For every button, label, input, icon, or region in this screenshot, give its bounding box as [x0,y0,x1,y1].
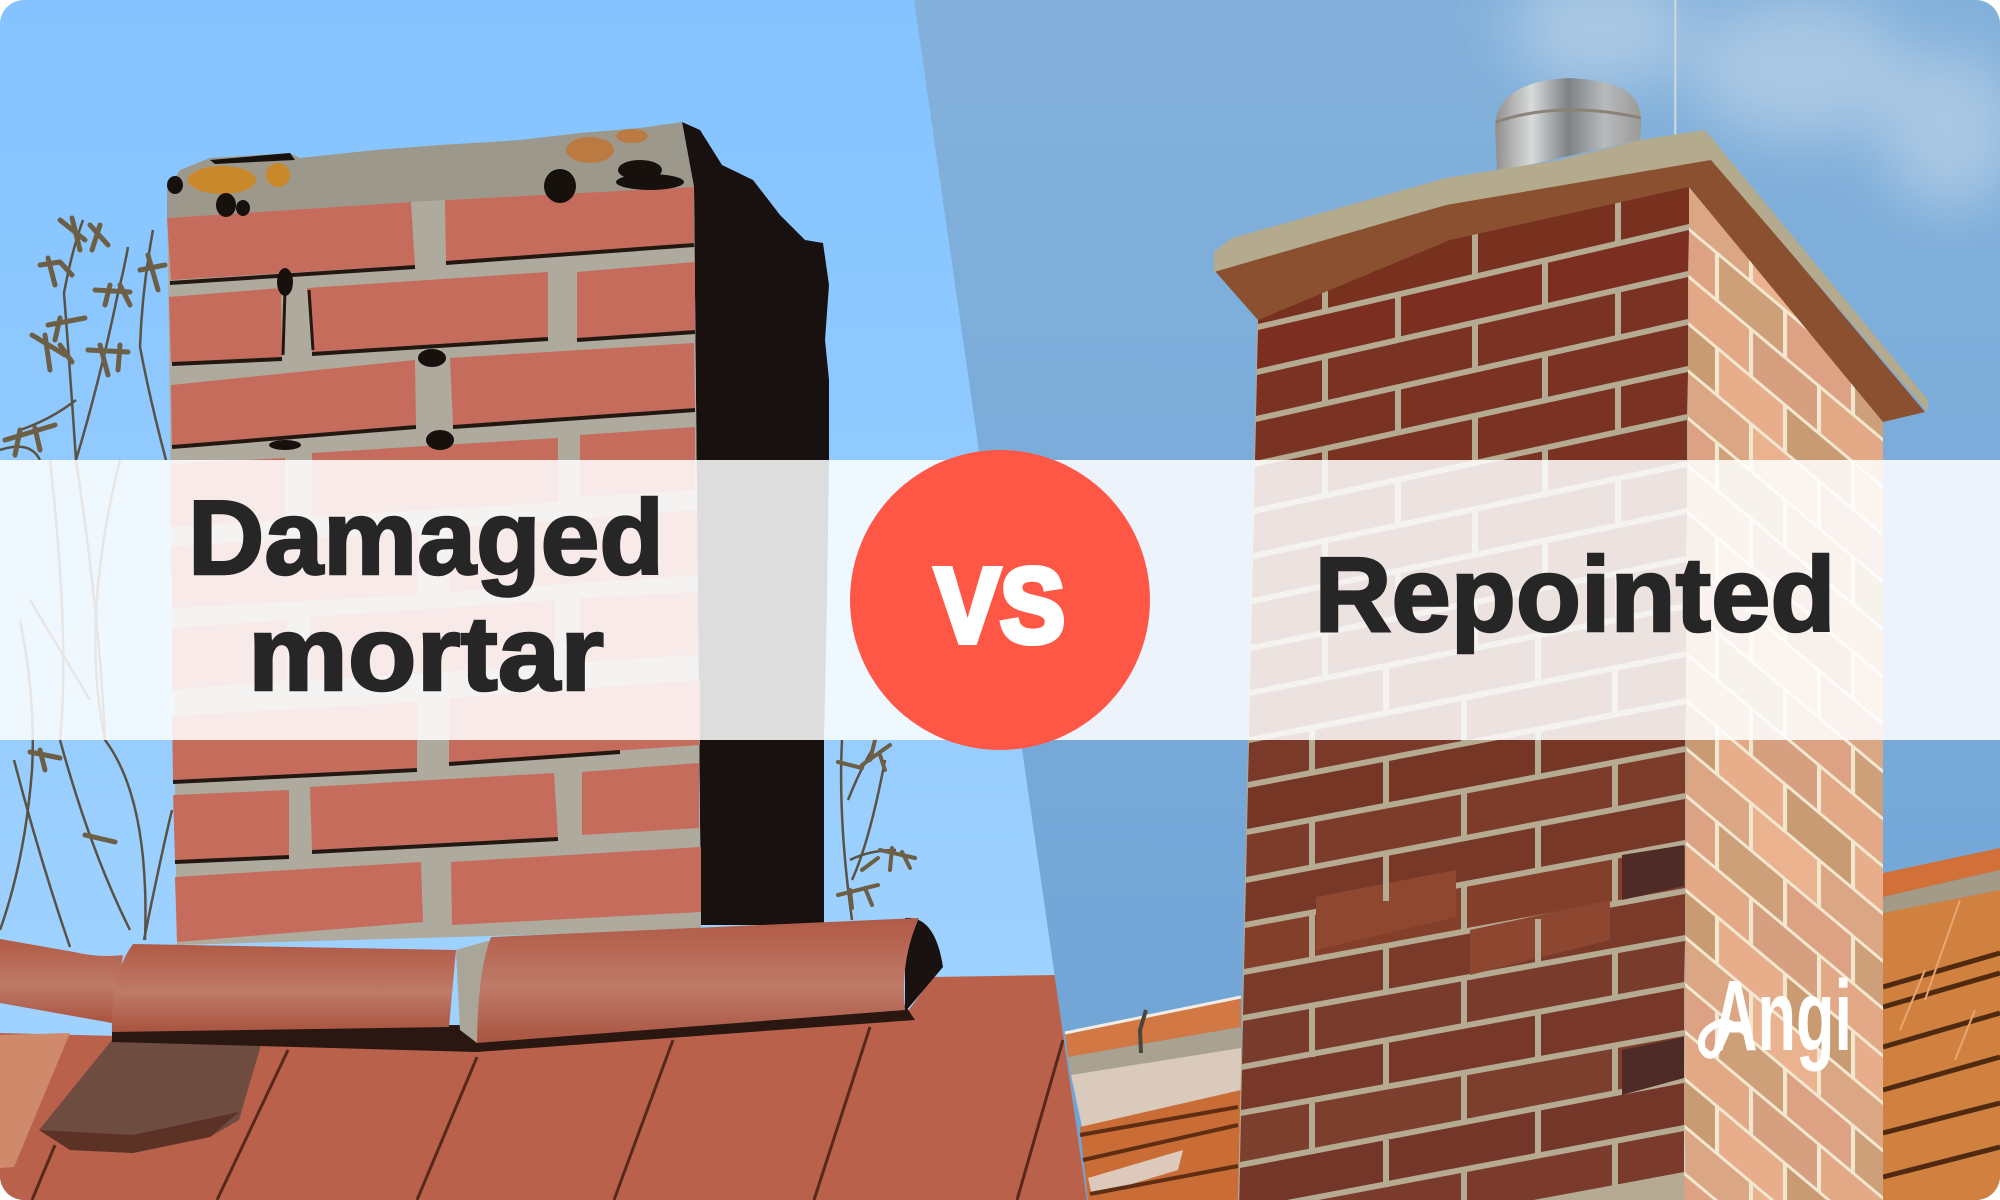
chimney cap: weathered mortar [167,122,694,218]
ridge shadow [112,1005,915,1052]
logo: Angi: Angi [1712,960,1852,1072]
roof: left of chimney [1065,997,1241,1200]
vs badge [850,450,1150,750]
bare tree: right [838,740,915,920]
heading: damaged mortar [194,496,658,692]
antenna [1674,0,1676,136]
smoke [1510,0,2000,210]
chimney cap top [1214,130,1928,412]
sky: right [900,0,2000,1200]
chimney front face [1238,183,1689,1200]
chimney cap underside [1214,158,1925,422]
stove pipe [1495,78,1641,172]
gutter bracket [1140,1010,1146,1053]
sky: left [0,0,1100,1200]
heading: repointed: Repointed [1314,536,1836,654]
ridge tile: far left [0,939,123,1023]
moss stains [167,153,684,450]
brown tile [39,1035,263,1153]
ridge tile opening [905,918,943,1012]
text: vs: VS [935,547,1065,665]
roof tile panel [0,975,1087,1200]
text: damaged: Damaged [188,479,664,597]
logo: Angi [1698,978,1848,1072]
bare tree: left [0,218,172,947]
roof: right of chimney [1883,848,2000,1200]
panel: repointed chimney photo [900,0,2000,1200]
chimney front with bricks [167,187,701,945]
roof tile seams [32,1027,1063,1200]
text: mortar: mortar [248,595,604,713]
panel: damaged chimney photo [0,0,1100,1200]
lichen [188,129,648,194]
mortar joint on ridge [456,940,491,1043]
ridge tile: middle [112,944,456,1032]
light tile [0,1033,70,1168]
translucent label band [0,460,2000,740]
ridge tile: right [477,918,919,1043]
chimney side: black [682,122,829,925]
chimney side face [1684,187,1883,1200]
